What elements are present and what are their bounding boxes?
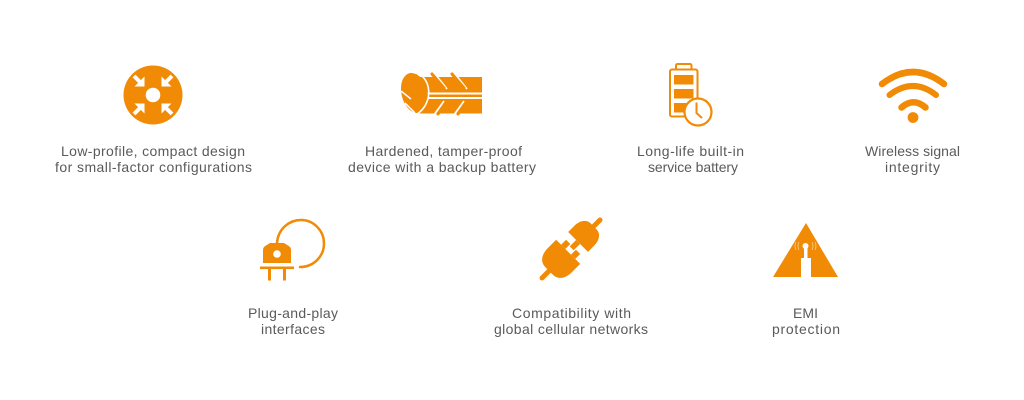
panel: EMI protection (772, 223, 840, 337)
panel: compact design (55, 66, 252, 175)
label: service battery: Long-life built-in (637, 143, 744, 159)
panel: hardened device (348, 70, 536, 175)
icon: warning triangle with antenna (773, 223, 838, 277)
label: cellular compatibility: Compatibility with (512, 305, 631, 321)
label: hardened device line 2: device with a backup battery (348, 159, 536, 175)
label: plug and play line 2: interfaces (261, 321, 325, 337)
label: plug and play: Plug-and-play (248, 305, 338, 321)
label: wireless signal line 2: integrity (885, 159, 940, 175)
icon: connecting plugs (530, 208, 612, 290)
label: wireless signal: Wireless signal (865, 143, 960, 159)
label: EMI protection: EMI (793, 305, 818, 321)
panel: cellular compatibility (494, 208, 648, 337)
icon: armored cable (397, 70, 482, 116)
label: service battery line 2: service battery (648, 159, 738, 175)
icon: battery with clock (670, 64, 712, 126)
icon: wifi (882, 72, 944, 123)
label: EMI protection line 2: protection (772, 321, 840, 337)
panel: wireless signal (865, 72, 960, 175)
icon: plug with cable (260, 220, 324, 280)
label: hardened device: Hardened, tamper-proof (365, 143, 522, 159)
icon: inward arrows circle (124, 66, 182, 124)
label: compact design: Low-profile, compact design (61, 143, 245, 159)
label: cellular compatibility line 2: global cellular networks (494, 321, 648, 337)
label: compact design line 2: for small-factor configurations (55, 159, 252, 175)
panel: service battery (637, 64, 744, 175)
panel: plug and play (248, 220, 338, 337)
